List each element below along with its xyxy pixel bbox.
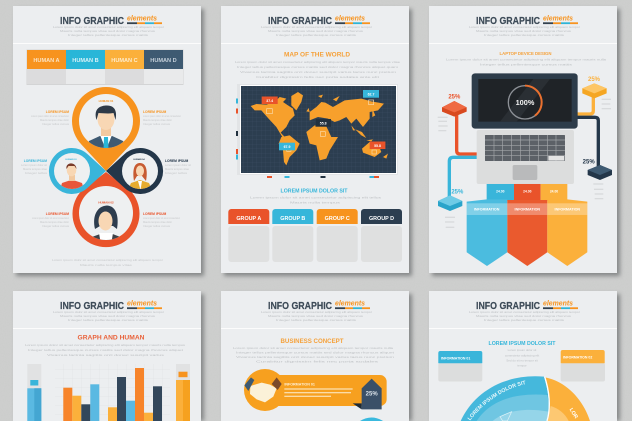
page header: Integer tellus pellentesque cursus mattis [276,318,357,322]
footer text: Mauris nulla tempus vitae [80,263,133,267]
cube: red [442,95,467,117]
banner: information blue [467,199,507,266]
group D [361,209,402,262]
callout: 37.4: 37.4 [266,99,273,103]
callout: lorem ipsum middle left: Lorem ipsum dolor sit [21,163,47,167]
laptop screen: 100% [516,98,535,107]
laptop diagram [438,73,612,266]
callout: lorem ipsum middle left: Mauris tempus vitae [23,167,48,171]
badge: 25% [353,379,382,409]
heading: laptop device design: LAPTOP DEVICE DESIGN [500,51,552,56]
callout: lorem ipsum upper left: LOREM IPSUM [46,110,69,114]
page header: Mauris nulla tempus vitae sed dolor magna rhoncus [60,314,156,318]
page header: Lorem ipsum dolor sit amet consectetur adipiscing elit aliquam tempor [261,310,372,314]
callout: lorem ipsum middle left: Integer tellus [25,171,48,175]
page header: Mauris nulla tempus vitae sed dolor magna rhoncus [476,29,572,33]
information 01 card: INFORMATION 01 [284,383,315,387]
page header: elements [543,16,573,22]
group C: GROUP C [325,216,350,222]
callout: 55.8 red [370,142,385,149]
page header: elements [127,300,157,308]
intro text [25,343,186,357]
group D: GROUP D [369,216,394,222]
next item circle [360,418,383,421]
cube: blue [438,190,464,211]
page header: elements [127,16,157,22]
information 01 card [244,369,387,411]
intro text: Curabitur dignissim felis nec porta sodales [256,360,379,364]
group A: GROUP A [236,216,261,222]
callout: lorem ipsum upper left: Lorem ipsum dolor sit amet consectetur [31,114,69,118]
center text: Lorem ipsum dolor sit [508,348,536,352]
callout: lorem ipsum lower left: LOREM IPSUM [46,212,69,216]
panel: graph page [13,291,204,421]
page header: Mauris nulla tempus vitae sed dolor magna rhoncus [476,314,572,318]
laptop base [477,130,574,184]
page header: Mauris nulla tempus vitae sed dolor magna rhoncus [268,29,364,33]
center text: consectetur adipiscing elit [505,354,539,358]
page header: INFO GRAPHIC [60,15,124,27]
callout: 62.7: 62.7 [368,92,374,96]
callout: lorem ipsum lower right: Integer tellus cursus [143,224,171,228]
group C [317,209,358,262]
page header [221,15,409,44]
bars [63,368,162,421]
callout: lorem ipsum upper left: Mauris tempus vitae dolor [40,118,69,122]
page header: Mauris nulla tempus vitae sed dolor magna rhoncus [268,314,364,318]
intro text: Integer tellus pellentesque cursus mattis sed dolor magna rhoncus aliquet quam [237,65,399,69]
center text: Sed do sit eu tempor sit [506,358,538,362]
page header: INFO GRAPHIC [268,15,332,27]
callout: 55.8 dark: 55.8 [320,122,327,126]
page header: Lorem ipsum dolor sit amet consectetur adipiscing elit aliquam tempor [469,310,580,314]
table: human A to D: HUMAN C [111,58,138,64]
callout: 62.7 [363,90,379,98]
tabs [487,184,567,201]
table: human A to D: HUMAN B [72,58,99,64]
subheading text: Mauris nulla tempus [290,200,341,204]
callout: 67.9: 67.9 [284,145,290,149]
footer text [52,258,163,267]
group B [272,209,313,262]
callout: 55.8 red: 55.8 [374,144,381,148]
heading: graph and human: GRAPH AND HUMAN [78,334,145,342]
panel: laptop page [429,6,620,276]
intro text: Integer tellus pellentesque cursus mattis [480,62,573,66]
page header [13,300,201,329]
pin: human 03 [49,148,106,194]
connectors [449,95,598,197]
table: human A to D: HUMAN D [150,58,177,64]
callout: lorem ipsum upper right [143,110,181,126]
intro text: Lorem ipsum dolor sit amet consectetur adipiscing elit aliquam tempor mauris nulla tempus [25,343,186,347]
page header: Integer tellus pellentesque cursus mattis [68,33,149,37]
page header: Integer tellus pellentesque cursus mattis [276,33,357,37]
callout: lorem ipsum upper right: Mauris tempus vitae dolor [143,118,172,122]
panel: pie page [429,291,622,421]
panel: business concept page [221,291,412,421]
pie chart [460,376,590,421]
pie chart: LOREM IPSUM DOLOR SIT [467,380,526,420]
intro text: Lorem ipsum dolor sit amet consectetur adipiscing elit aliquam tempor mauris nulla tempus vitae [235,60,400,64]
callout: lorem ipsum upper right: Lorem ipsum dolor sit amet consectetur [143,114,181,118]
intro text [233,346,395,364]
callout: lorem ipsum lower left: Integer tellus cursus [42,224,70,228]
page header: Integer tellus pellentesque cursus mattis [484,318,565,322]
heading: map of the world: MAP OF THE WORLD [284,52,350,58]
gauge right [176,364,190,421]
table: human A to D [26,50,184,85]
page header [221,300,409,329]
banner: information yellow [547,199,587,266]
page header: Integer tellus pellentesque cursus mattis [68,318,149,322]
cube notes [438,99,611,228]
panel: humans page [13,6,204,276]
tabs: 24.00 [550,189,558,193]
information box left: INFORMATION 01 [441,356,470,360]
banner: information yellow: INFORMATION [555,208,580,212]
callout: lorem ipsum upper left [31,110,70,126]
center text: tempor [517,364,527,368]
callout: lorem ipsum lower right: Mauris tempus vitae dolor [143,220,172,224]
callout: lorem ipsum upper right: Integer tellus cursus [143,122,171,126]
pin: human 04 [106,148,163,194]
page header: Mauris nulla tempus vitae sed dolor magna rhoncus [60,29,156,33]
cube: blue: 25% [451,190,464,196]
icon: handshake [244,377,282,402]
callout: lorem ipsum middle right: Mauris tempus vitae [165,167,190,171]
callout: lorem ipsum lower right: Lorem ipsum dolor sit amet consectetur [143,216,180,220]
intro text [235,60,400,79]
page header [13,15,201,44]
page header: elements [543,300,573,308]
banner: information red: INFORMATION [515,208,540,212]
callout: lorem ipsum middle right: Integer tellus [165,171,188,175]
intro text: Integer tellus pellentesque cursus mattis sed dolor magna rhoncus aliquet [28,348,183,352]
cube: yellow [582,77,607,98]
pin: human 03: HUMAN 03 [65,158,77,161]
pin: human 02: HUMAN 02 [98,200,114,204]
page header: INFO GRAPHIC [60,300,124,312]
page header: INFO GRAPHIC [476,300,540,312]
pin: human 01: HUMAN 01 [99,99,114,103]
pin: human 02 [72,172,140,247]
gauge left [27,364,41,421]
page header: Integer tellus pellentesque cursus mattis [484,33,565,37]
center text [505,348,539,368]
callout: lorem ipsum lower right: LOREM IPSUM [143,212,167,216]
tabs: 24.00 [523,189,532,193]
heading: business concept: BUSINESS CONCEPT [280,338,344,345]
axis ticks [236,98,379,178]
banner: information blue: INFORMATION [474,208,500,212]
intro text [446,58,606,66]
banner: information red [507,200,547,266]
subheading text: Lorem ipsum dolor sit amet consectetur adipiscing elit tellus [250,196,382,200]
information box left [438,351,482,382]
callout: lorem ipsum lower left: Mauris tempus vitae dolor [40,220,69,224]
intro text: Curabitur dignissim felis nec porta sodales ante elit [256,75,379,79]
laptop screen [472,73,578,129]
world map chart [236,84,398,178]
page header: INFO GRAPHIC [476,15,540,27]
information box right [561,350,605,382]
pie chart: LOR [568,407,579,420]
intro text: Lorem ipsum dolor sit amet consectetur adipiscing elit aliquam tempor mauris nulla [446,58,606,62]
group A [228,209,269,262]
callout: lorem ipsum middle left: LOREM IPSUM [24,159,47,163]
intro text: Vivamus lacinia sagittis orci donec suscipit varius lacus nunc pretium [236,355,395,359]
callout: 55.8 dark [316,119,331,127]
page header: Lorem ipsum dolor sit amet consectetur adipiscing elit aliquam tempor [469,25,580,29]
page header: Lorem ipsum dolor sit amet consectetur adipiscing elit aliquam tempor [53,25,164,29]
callout: lorem ipsum middle right [165,159,191,175]
subheading: LOREM IPSUM DOLOR SIT [280,188,348,194]
callout: lorem ipsum lower left [32,212,70,228]
panel: map page [221,6,412,276]
cube: red: 25% [448,95,461,101]
information box right: INFORMATION 02 [563,356,592,360]
callout: lorem ipsum upper left: Integer tellus cursus [42,122,70,126]
cube: yellow: 25% [588,77,601,83]
continents [251,92,388,165]
intro text: Integer tellus pellentesque cursus mattis sed dolor magna rhoncus aliquet [236,350,394,354]
callout: lorem ipsum lower right [143,212,180,228]
page header [429,300,617,329]
callout: 37.4 [262,96,278,104]
bar chart [27,364,190,421]
table: human A to D: HUMAN A [33,58,60,64]
callout: lorem ipsum lower left: Lorem ipsum dolor sit amet consectetur [32,216,69,220]
pin: human 01 [72,87,140,171]
tabs: 24.00 [496,189,505,193]
callout: 67.9 [279,143,295,150]
intro text: Lorem ipsum dolor sit amet consectetur adipiscing elit aliquam tempor mauris nulla [233,346,393,350]
page header: Lorem ipsum dolor sit amet consectetur adipiscing elit aliquam tempor [53,310,164,314]
intro text: Vivamus lacinia sagittis orci donec suscipit varius lacus nunc pretium [240,70,397,74]
callout: lorem ipsum middle left [21,159,48,175]
intro text: Vivamus lacinia sagittis orci donec suscipit varius [47,353,165,357]
cube: navy: 25% [583,160,595,166]
page header: INFO GRAPHIC [268,300,332,312]
cube: navy [583,160,612,180]
page header: elements [335,300,365,308]
page header: Lorem ipsum dolor sit amet consectetur adipiscing elit aliquam tempor [261,25,372,29]
page header: elements [335,16,365,22]
callout: lorem ipsum middle right: Lorem ipsum dolor sit [165,163,191,167]
group B: GROUP B [280,216,305,222]
callout: lorem ipsum upper right: LOREM IPSUM [143,110,167,114]
footer text: Lorem ipsum dolor sit amet consectetur adipiscing elit aliquam tempor [52,258,163,262]
page header [429,15,617,44]
callout: lorem ipsum middle right: LOREM IPSUM [165,159,189,163]
subheading text [250,196,382,204]
badge: 25%: 25% [366,391,378,397]
heading: lorem ipsum dolor sit: LOREM IPSUM DOLOR SIT [488,341,556,347]
pin: human 04: HUMAN 04 [133,158,145,161]
